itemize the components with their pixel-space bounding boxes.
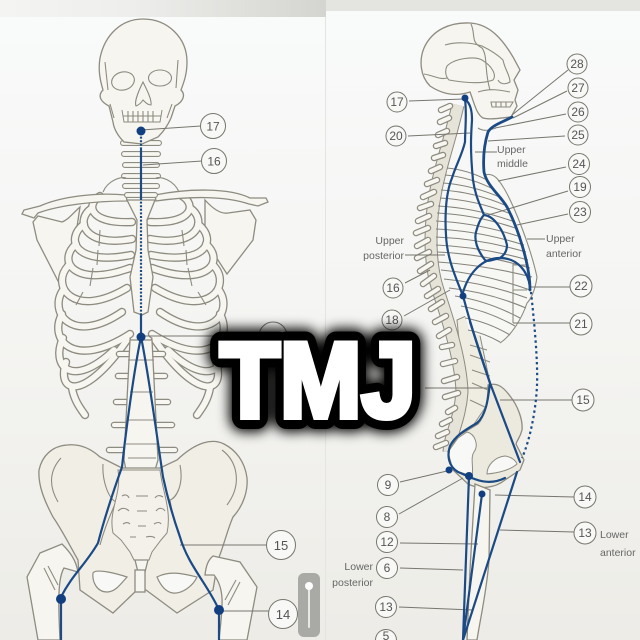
callouts front: 14 xyxy=(276,607,290,622)
clavicles xyxy=(22,190,268,218)
callouts side: 8 xyxy=(384,510,391,524)
icon: slider control xyxy=(298,573,320,637)
icon: skull front xyxy=(99,19,187,144)
region labels side: posterior xyxy=(332,577,373,589)
icon: skull side xyxy=(421,23,520,130)
callouts side: 13 xyxy=(379,600,393,614)
ribs side xyxy=(436,168,532,342)
region labels side: middle xyxy=(497,158,528,170)
callouts side: 6 xyxy=(384,561,391,575)
chest wall side xyxy=(445,170,537,343)
region labels side: Upper xyxy=(497,144,526,156)
callouts side: 25 xyxy=(571,128,585,142)
spine band xyxy=(431,105,462,452)
vertebrae lumbar xyxy=(109,354,175,450)
callouts side: 15 xyxy=(576,393,590,407)
leader lines side xyxy=(399,70,574,610)
panel: front view skeleton xyxy=(22,19,298,640)
sternum xyxy=(127,200,155,315)
callouts side: 21 xyxy=(574,317,588,331)
callouts front: 15 xyxy=(274,538,288,553)
blue meridian lines side xyxy=(446,94,537,640)
region labels side: Upper xyxy=(546,233,575,245)
callouts side: 18 xyxy=(385,313,399,327)
title: TMJ xyxy=(220,320,416,440)
callouts side: 24 xyxy=(572,157,586,171)
callouts front: 16 xyxy=(207,154,221,168)
obturator holes xyxy=(93,571,127,592)
upper ribs ring xyxy=(103,178,179,192)
callouts front xyxy=(200,114,298,628)
cartilage xyxy=(76,230,206,305)
callouts side: 22 xyxy=(574,279,588,293)
blue meridian lines front xyxy=(56,126,224,640)
title: TMJ xyxy=(220,320,416,440)
femurs front xyxy=(27,544,257,640)
callouts side: 26 xyxy=(571,105,585,119)
femur side xyxy=(467,484,490,640)
callouts side: 14 xyxy=(578,490,592,504)
scapulae xyxy=(33,200,256,281)
spinous processes xyxy=(416,106,458,447)
lumbar vertebral bodies side xyxy=(452,312,490,440)
region labels side: anterior xyxy=(546,248,582,260)
title: TMJ xyxy=(220,320,416,440)
region labels side: Lower xyxy=(600,529,629,541)
callouts side: 12 xyxy=(380,535,394,549)
sacrum xyxy=(112,470,168,560)
region labels side: Lower xyxy=(344,561,373,573)
callouts side: 16 xyxy=(386,281,400,295)
region labels side: Upper xyxy=(375,235,404,247)
callouts side: 23 xyxy=(573,205,587,219)
pelvis front xyxy=(39,441,247,613)
callouts side: 27 xyxy=(571,81,585,95)
leader lines front xyxy=(141,126,269,611)
callouts side xyxy=(376,54,596,640)
callouts side: 20 xyxy=(389,129,403,143)
region labels side: anterior xyxy=(600,547,636,559)
region labels side: posterior xyxy=(363,250,404,262)
callouts side: 17 xyxy=(390,95,404,109)
callouts side: 28 xyxy=(570,57,584,71)
callouts front: 17 xyxy=(206,120,220,134)
panel: side view skeleton xyxy=(332,23,636,640)
pelvis side xyxy=(448,384,524,487)
region labels side xyxy=(332,144,636,589)
lumbar side xyxy=(470,345,490,408)
cervical vertebrae xyxy=(123,143,159,195)
rib cage xyxy=(58,196,224,415)
callouts side: 13 xyxy=(578,526,592,540)
callouts side: 19 xyxy=(573,180,587,194)
callouts side: 9 xyxy=(385,478,392,492)
rib front line xyxy=(485,174,537,343)
